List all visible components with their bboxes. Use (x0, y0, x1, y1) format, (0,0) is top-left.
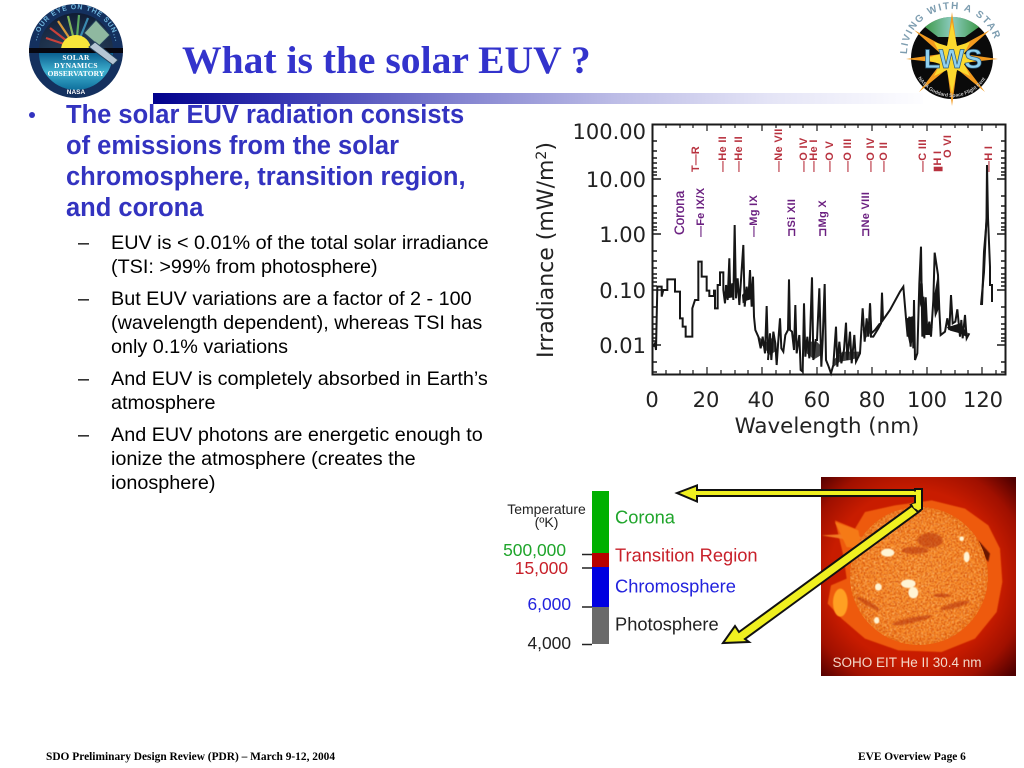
y-axis title: 2 (534, 151, 550, 160)
red line labels: transition region and chromosphere: —O II (878, 142, 890, 172)
sub-bullet: variations: only 0.1% variations (111, 336, 288, 358)
sub-bullet: ionize: ionosphere) (111, 472, 215, 494)
y-axis labels: 0.01 (599, 334, 646, 358)
red line labels: transition region and chromosphere: —H I (983, 146, 995, 172)
x-axis labels: 100 (907, 388, 947, 412)
solar atmosphere temperature diagram (504, 477, 1016, 676)
red line labels: transition region and chromosphere: —O IV (865, 137, 877, 172)
purple line labels: corona: ⊐Mg X (817, 200, 829, 237)
sub-bullet: absorbed (78, 368, 488, 414)
title: What is the solar EUV ? (182, 38, 591, 82)
sub-bullet: variations: But EUV variations are a factor of 2 - 100 (111, 288, 472, 310)
red line labels: transition region and chromosphere: —O IV (798, 137, 810, 172)
plot frame and ticks (652, 124, 1006, 374)
logo: Living With a Star (900, 2, 1000, 106)
red line labels: transition region and chromosphere (690, 128, 995, 172)
arrow: to corona (677, 486, 915, 502)
red line labels: transition region and chromosphere: —C III (917, 139, 929, 172)
sub-bullet: variations: – (78, 288, 89, 310)
y-axis labels: 100.00 (573, 120, 646, 144)
bullet: main statement: of emissions from the solar (66, 132, 399, 160)
sub-bullet: absorbed: – (78, 368, 89, 390)
layer names: Corona (615, 506, 676, 528)
sub-bullet: total irradiance: – (78, 232, 89, 254)
bullet: main statement (29, 101, 466, 222)
sub-bullet: ionize: – (78, 424, 89, 446)
sub-bullet: variations (78, 288, 482, 358)
x-axis title: Wavelength (nm) (735, 414, 919, 439)
red line labels: transition region and chromosphere: —O V (824, 140, 836, 172)
logo: Solar Dynamics Observatory: NASA (67, 89, 86, 96)
purple line labels: corona: —Fe IX/X (695, 187, 707, 237)
logo: Living With a Star: LIVING WITH A STAR (900, 2, 1000, 54)
sub-bullet: variations: (wavelength dependent), whereas TSI has (111, 312, 482, 334)
sub-bullet: total irradiance (78, 232, 489, 278)
temperature values (503, 540, 571, 653)
red line labels: transition region and chromosphere: —He II (733, 136, 745, 172)
y-axis title: Irradiance (mW/m (534, 160, 559, 358)
x-axis labels: 120 (963, 388, 1003, 412)
purple line labels: corona: Corona (672, 190, 687, 235)
logo: Solar Dynamics Observatory: ...OUR EYE ON THE SUN... (36, 4, 117, 41)
temperature values: 15,000 (515, 558, 568, 578)
layer names: Chromosphere (615, 576, 736, 596)
temperature heading: Temperature (507, 501, 586, 517)
temperature values: 6,000 (527, 594, 571, 614)
temperature heading: (ºK) (535, 514, 558, 530)
x-axis labels: 60 (804, 388, 830, 412)
x-axis labels (645, 388, 1003, 412)
red line labels: transition region and chromosphere: ▮H I (932, 151, 944, 172)
red line labels: transition region and chromosphere: —Ne VII (773, 128, 785, 172)
sub-bullet: ionize: And EUV photons are energetic enough to (111, 424, 483, 446)
bullet: main statement: chromosphere, transition region, (66, 163, 466, 191)
logo: Solar Dynamics Observatory: OBSERVATORY (48, 69, 105, 78)
title bar gradient (153, 93, 923, 104)
red line labels: transition region and chromosphere: —O III (842, 138, 854, 172)
sub-bullet: ionize (78, 424, 483, 494)
logo: Solar Dynamics Observatory: DYNAMICS (54, 61, 98, 70)
bullet list (29, 101, 489, 494)
x-axis labels: 0 (645, 388, 659, 412)
purple line labels: corona (672, 187, 872, 237)
sub-bullet: absorbed: And EUV is completely absorbed in Earth’s (111, 368, 488, 390)
red line labels: transition region and chromosphere: —He II (717, 136, 729, 172)
logo: Solar Dynamics Observatory (29, 4, 123, 98)
y-axis labels: 1.00 (599, 223, 646, 247)
bullet: main statement: and corona (66, 194, 203, 222)
y-axis title: ) (534, 142, 559, 151)
purple line labels: corona: —Mg IX (748, 195, 760, 237)
image: SOHO EIT sun (821, 477, 1016, 676)
temperature values: 500,000 (503, 540, 566, 560)
x-axis labels: 20 (693, 388, 719, 412)
sub-bullet: total irradiance: EUV is < 0.01% of the total solar irradiance (111, 232, 489, 254)
layer names (615, 506, 758, 634)
y-axis labels: 10.00 (586, 168, 646, 192)
purple line labels: corona: ⊐Ne VIII (860, 192, 872, 237)
temperature column (582, 491, 609, 644)
y-axis labels: 0.10 (599, 279, 646, 303)
red line labels: transition region and chromosphere: O VI (942, 135, 954, 158)
footer: right: EVE Overview Page 6 (858, 751, 966, 763)
red line labels: transition region and chromosphere: —He I (808, 139, 820, 172)
purple line labels: corona: ⊐Si XII (786, 199, 798, 237)
temperature values: 4,000 (527, 633, 571, 653)
logo: Solar Dynamics Observatory: SOLAR (62, 53, 90, 62)
sub-bullet: absorbed: atmosphere (111, 392, 215, 414)
x-axis labels: 80 (859, 388, 885, 412)
arrow: to photosphere (723, 489, 922, 643)
sub-bullet: ionize: ionize the atmosphere (creates the (111, 448, 416, 470)
sub-bullet: total irradiance: (TSI: >99% from photosphere) (111, 256, 378, 278)
bullet: main statement: The solar EUV radiation consists (66, 101, 464, 129)
image: SOHO EIT sun: SOHO EIT He II 30.4 nm (832, 655, 982, 670)
layer names: Transition Region (615, 544, 758, 566)
logo: Living With a Star: LWS (924, 44, 982, 74)
footer: left: SDO Preliminary Design Review (PDR) – March 9-12, 2004 (46, 751, 335, 763)
spectrum line (653, 165, 992, 373)
y-axis labels (573, 120, 646, 358)
layer names: Photosphere (615, 614, 719, 634)
red line labels: transition region and chromosphere: T—R (690, 146, 702, 172)
temperature heading (507, 501, 586, 530)
x-axis labels: 40 (748, 388, 774, 412)
